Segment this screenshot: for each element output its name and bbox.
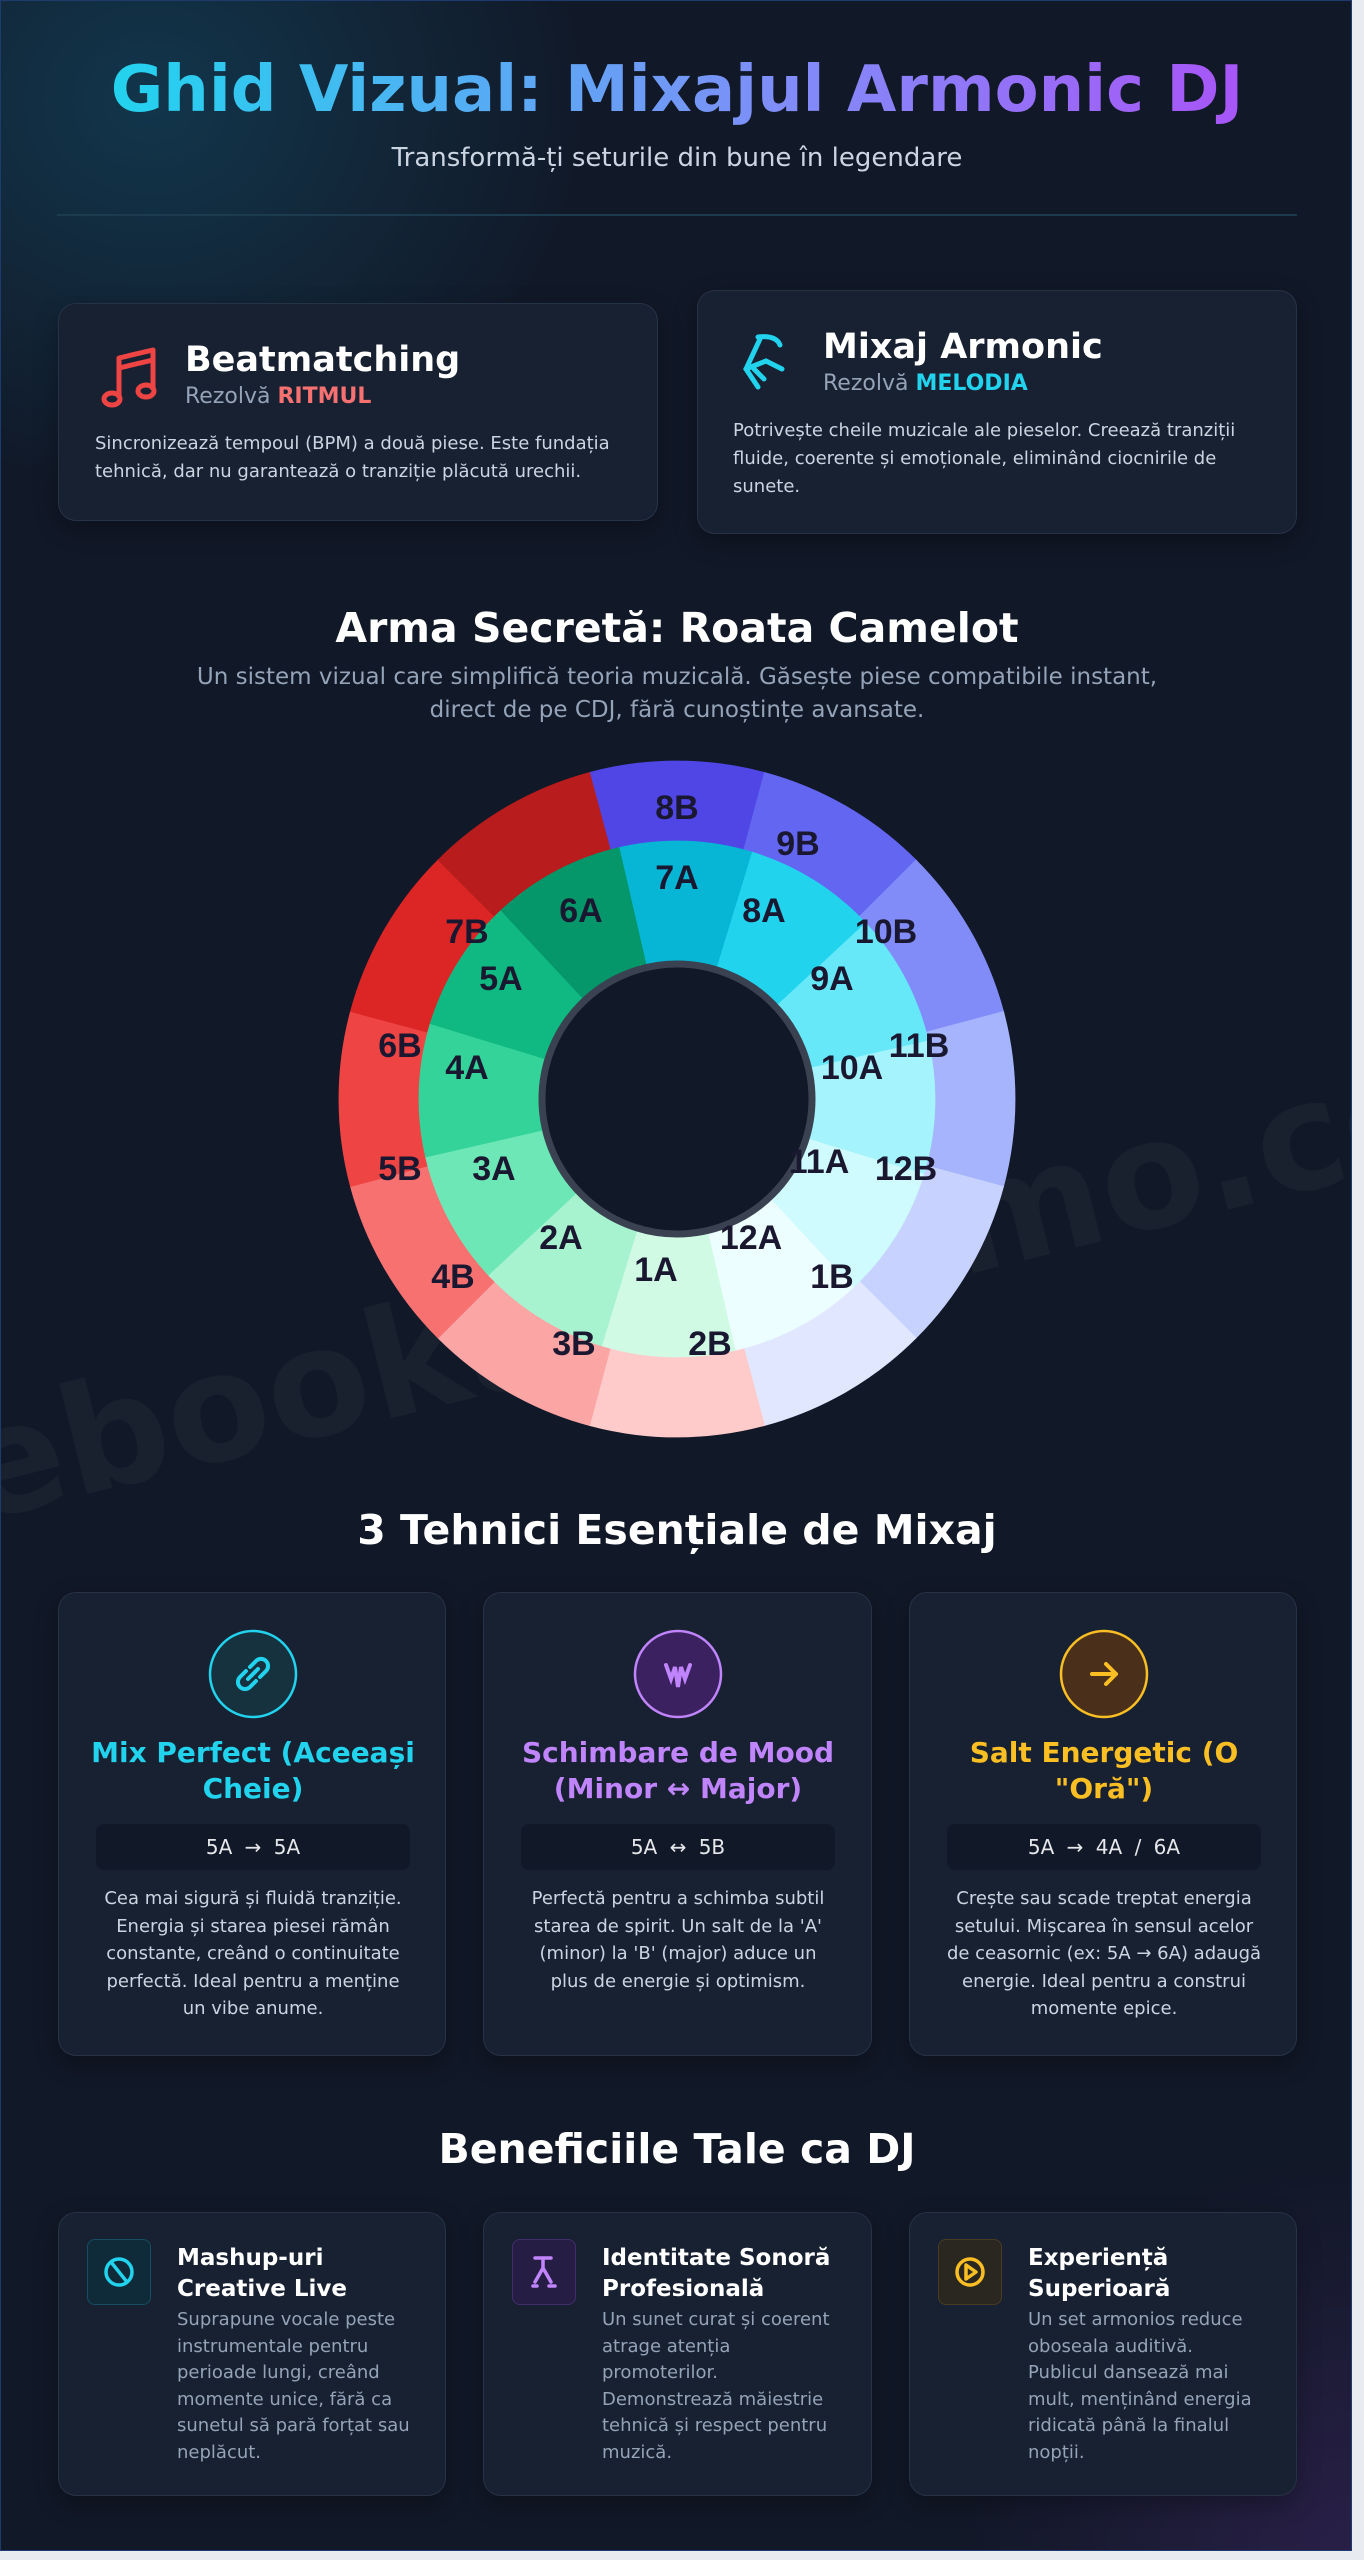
text: Suprapune vocale peste instrumentale pentru perioade lungi, creând momente unice, fără ca sunetul să pară forțat sau neplăcut.: [177, 2309, 410, 2463]
text: Perfectă pentru a schimba subtil starea de spirit. Un salt de la 'A' (minor) la 'B' (major) aduce un plus de energie și optimism.: [532, 1888, 824, 1992]
title: Schimbare de Mood (Minor ↔ Major): [522, 1736, 834, 1805]
panel: mixaj armonic: Rezolvă MELODIA: [823, 371, 1028, 396]
chart: camelot wheel: 12A: [720, 1219, 782, 1257]
panel: identitate: [483, 2212, 872, 2496]
icon: harmonic: [743, 334, 784, 390]
title: Ghid Vizual: Mixajul Armonic DJ: [111, 53, 1243, 127]
chart: camelot wheel: 7B: [445, 913, 489, 951]
heading: Beatmatching: [185, 340, 460, 380]
code: 5A ↔ 5B: [631, 1835, 725, 1859]
chart: camelot wheel: 12B: [875, 1150, 937, 1188]
heading: Mixaj Armonic: [823, 327, 1103, 367]
panel: salt energetic: [909, 1592, 1297, 2056]
title: Mashup-uri Creative Live: [177, 2245, 347, 2302]
icon: identity: [512, 2239, 576, 2305]
title: Identitate Sonoră Profesională: [602, 2245, 830, 2302]
chart: camelot wheel: 3B: [552, 1325, 596, 1363]
code: 5A → 4A / 6A: [1028, 1835, 1180, 1859]
panel: mixaj armonic: [697, 290, 1297, 534]
chart: camelot wheel: 5A: [479, 960, 523, 998]
heading: benefits: Beneficiile Tale ca DJ: [438, 2125, 916, 2173]
panel: experienta: [909, 2212, 1297, 2496]
text: Sincronizează tempoul (BPM) a două piese. Este fundația tehnică, dar nu garantează o tranziție plăcută urechii.: [95, 433, 610, 482]
heading: camelot: Arma Secretă: Roata Camelot: [335, 604, 1019, 652]
chart: camelot wheel: 1B: [810, 1258, 854, 1296]
icon: arrow: [1060, 1630, 1148, 1718]
panel: mix perfect: [58, 1592, 446, 2056]
chart: camelot wheel: 1A: [634, 1251, 678, 1289]
panel: schimbare de mood: [483, 1592, 872, 2056]
chart: camelot wheel: 3A: [472, 1150, 516, 1188]
chart: camelot wheel: 4B: [431, 1258, 475, 1296]
code: [96, 1824, 410, 1870]
icon: mashup: [87, 2239, 151, 2305]
chart: camelot wheel: 2A: [539, 1219, 583, 1257]
chart: camelot wheel: 11A: [789, 1143, 849, 1181]
icon: music note: [102, 348, 156, 408]
icon: link: [208, 1630, 298, 1718]
chart: camelot wheel: 4A: [445, 1049, 489, 1087]
panel: mashup: [58, 2212, 446, 2496]
chart: camelot wheel: 10A: [821, 1049, 883, 1087]
title: Experiență Superioară: [1028, 2245, 1170, 2302]
text: Un set armonios reduce oboseala auditivă. Publicul dansează mai mult, menținând energia ridicată până la finalul nopții.: [1028, 2309, 1252, 2463]
chart: camelot wheel: 8B: [655, 789, 699, 827]
chart: camelot wheel: 7A: [655, 859, 699, 897]
code: [947, 1824, 1261, 1870]
chart: camelot wheel: 9B: [776, 825, 820, 863]
text: camelot subtitle: Un sistem vizual care simplifică teoria muzicală. Găsește piese compatibile instant, direct de pe CDJ, fără cunoștințe avansate.: [197, 664, 1157, 723]
chart: camelot wheel: 6B: [378, 1027, 422, 1065]
title: Salt Energetic (O "Oră"): [970, 1736, 1238, 1805]
code: 5A → 5A: [206, 1835, 300, 1859]
text: Un sunet curat și coerent atrage atenția promoterilor. Demonstrează măiestrie tehnică și respect pentru muzică.: [602, 2309, 830, 2463]
text: Cea mai sigură și fluidă tranziție. Energia și starea piesei rămân constante, creând o continuitate perfectă. Ideal pentru a menține un vibe anume.: [104, 1888, 402, 2019]
subtitle: Transformă-ți seturile din bune în legendare: [392, 143, 962, 173]
title: Mix Perfect (Aceeași Cheie): [91, 1736, 415, 1805]
panel: beatmatching: [58, 303, 658, 521]
chart: camelot wheel: 11B: [889, 1027, 949, 1065]
chart: camelot wheel: 10B: [855, 913, 917, 951]
heading: techniques: 3 Tehnici Esențiale de Mixaj: [357, 1506, 997, 1554]
icon: wave: [634, 1630, 722, 1718]
text: Potrivește cheile muzicale ale pieselor. Creează tranziții fluide, coerente și emoționale, eliminând ciocnirile de sunete.: [733, 420, 1235, 497]
text: Crește sau scade treptat energia setului. Mișcarea în sensul acelor de ceasornic (ex: 5A → 6A) adaugă energie. Ideal pentru a construi momente epice.: [947, 1888, 1261, 2019]
chart: camelot wheel: 6A: [559, 892, 603, 930]
code: [521, 1824, 835, 1870]
chart: camelot wheel: 2B: [688, 1325, 732, 1363]
chart: camelot wheel: 8A: [742, 892, 786, 930]
panel: beatmatching: Rezolvă RITMUL: [185, 384, 371, 409]
chart: camelot wheel: [338, 760, 1016, 1438]
icon: play: [938, 2239, 1002, 2305]
chart: camelot wheel: 5B: [378, 1150, 422, 1188]
chart: camelot wheel: 9A: [810, 960, 854, 998]
